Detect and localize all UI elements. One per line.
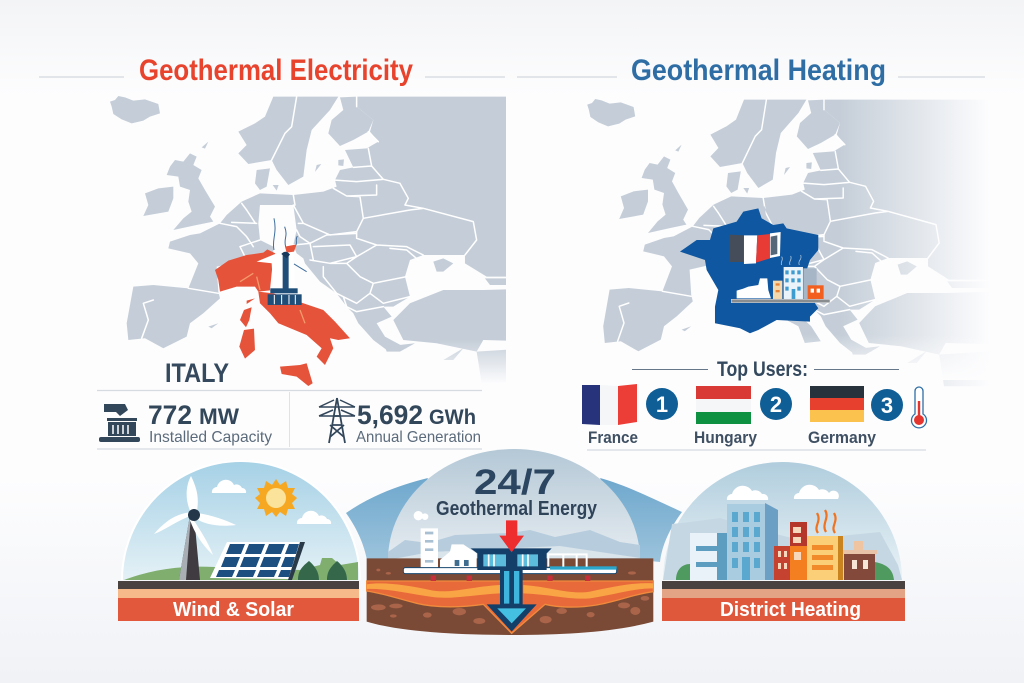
stat: annual generation: GWh — [429, 406, 476, 429]
cloud — [794, 485, 839, 499]
ground band: wind and solar: Wind & Solar — [173, 599, 294, 621]
illustration: sky dome with wind turbine and solar panel — [121, 460, 361, 580]
user 2: Hungary: 2 — [770, 392, 782, 417]
stat: installed capacity: MW — [199, 404, 239, 429]
heading: geothermal heating: Geothermal Heating — [631, 54, 886, 87]
stat: annual generation: 5,692 — [357, 400, 423, 430]
icon: sun — [255, 479, 297, 517]
illustration: sky dome with city — [663, 462, 902, 580]
building: heating plant with heat waves — [807, 510, 843, 580]
panel: wind and solar — [118, 460, 361, 621]
map: Europe with Italy highlighted — [110, 96, 506, 378]
blue connector wings — [346, 478, 682, 562]
underground cross-section — [367, 511, 653, 635]
cloud — [297, 511, 331, 524]
stat: annual generation — [356, 400, 481, 446]
map highlight: France — [680, 208, 830, 333]
user 2: Hungary — [694, 386, 792, 447]
icon: wind turbine — [154, 476, 236, 580]
building: tall tower — [727, 503, 778, 580]
icon: French flag on map — [729, 232, 781, 264]
user 3: Germany — [808, 386, 903, 447]
label: ITALY: ITALY — [165, 358, 229, 388]
cloud — [212, 480, 246, 493]
panel: 24/7 geothermal energy — [346, 449, 682, 635]
icon: geothermal well and arrow — [471, 548, 552, 632]
user 1: France: France — [588, 428, 638, 447]
panel: geothermal heating — [517, 54, 1024, 450]
cloud — [727, 486, 768, 500]
user 3: Germany: Germany — [808, 428, 877, 447]
ground band: district heating — [662, 581, 905, 621]
building: low block — [690, 533, 727, 580]
user 2: Hungary: Hungary — [694, 428, 757, 447]
building: brown block — [843, 541, 877, 580]
building: red and orange block — [774, 522, 807, 580]
icon: trees — [298, 561, 347, 580]
panel: district heating — [662, 462, 905, 621]
ground band: district heating: District Heating — [720, 599, 861, 621]
icon: transmission pylon — [319, 398, 355, 443]
map highlight: Italy — [215, 244, 350, 386]
stat: annual generation: Annual Generation — [356, 429, 481, 446]
heading: geothermal electricity: Geothermal Electricity — [139, 54, 413, 87]
icon: solar panel — [210, 542, 305, 580]
stat: installed capacity: 772 — [148, 400, 192, 430]
icon: city and plant buildings — [731, 255, 830, 303]
user 3: Germany: 3 — [881, 393, 893, 418]
ground band: wind and solar — [118, 581, 359, 621]
stat: installed capacity — [148, 400, 272, 446]
dome with title: 24/7 — [474, 463, 556, 502]
heading: Top Users: Top Users: — [717, 358, 808, 381]
icon: power plant — [99, 404, 140, 442]
map: Europe with France highlighted — [587, 99, 968, 386]
icon: plant on surface — [403, 511, 617, 581]
stat: installed capacity: Installed Capacity — [149, 429, 272, 446]
icon: red down arrow — [499, 520, 524, 552]
icon: thermometer — [912, 387, 927, 428]
icon: geothermal plant tower on Italy — [257, 218, 307, 305]
dome with title — [388, 449, 640, 560]
user 1: France — [582, 384, 678, 447]
panel: geothermal electricity — [39, 58, 506, 450]
dome with title: Geothermal Energy — [436, 498, 598, 520]
user 1: France: 1 — [656, 392, 668, 417]
